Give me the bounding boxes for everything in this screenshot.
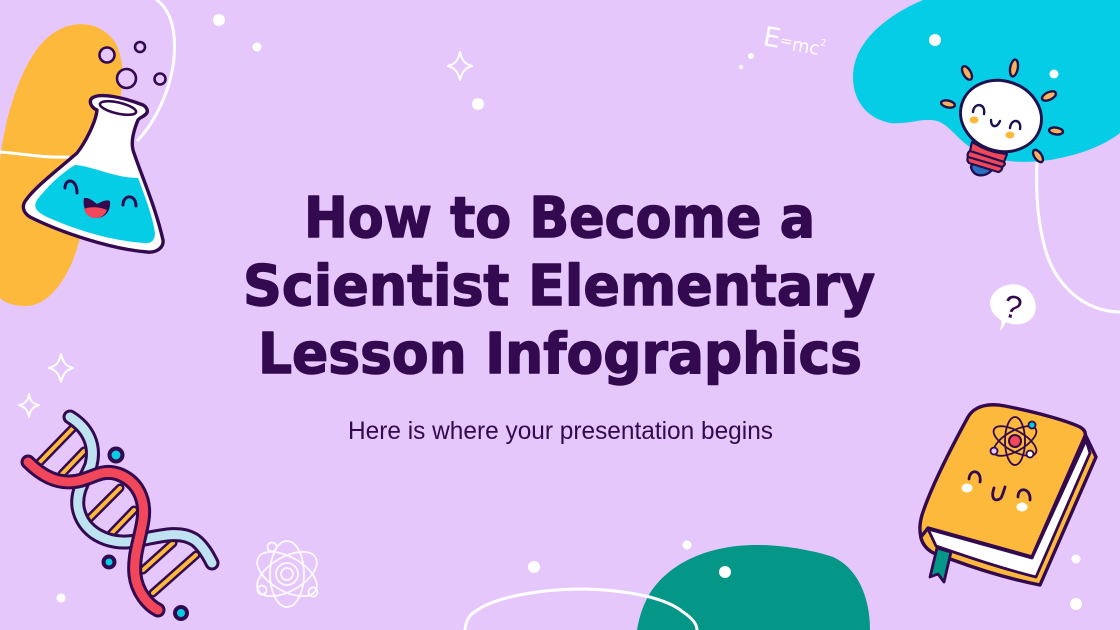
title xyxy=(243,186,875,387)
icon: smiling flask xyxy=(23,42,165,252)
back cover xyxy=(920,432,1096,585)
cyan blob: top right xyxy=(853,0,1120,162)
title: Scientist Elementary xyxy=(243,254,875,319)
rungs xyxy=(40,428,196,593)
bulb face xyxy=(970,105,1020,138)
front cover xyxy=(920,405,1085,557)
bulb glass xyxy=(951,70,1051,162)
pages xyxy=(928,440,1090,577)
icon: white atom xyxy=(250,541,324,607)
icon: E=mc2 formula: mc xyxy=(790,34,821,60)
bulb base xyxy=(971,158,992,175)
icon: DNA helix xyxy=(28,417,212,619)
subtitle: Here is where your presentation begins xyxy=(348,417,773,445)
green blob: bottom xyxy=(637,545,870,630)
flask face xyxy=(65,181,136,218)
flask liquid xyxy=(35,165,155,243)
icon: sparkles xyxy=(19,52,472,417)
yellow blob: top left xyxy=(0,24,123,306)
title: Lesson Infographics xyxy=(258,322,862,387)
title: How to Become a xyxy=(304,186,815,251)
white curve: top left xyxy=(0,0,174,157)
book atom emblem xyxy=(989,417,1041,465)
book face xyxy=(962,472,1030,512)
blue dots xyxy=(104,448,187,619)
bookmark xyxy=(930,548,951,582)
red strand xyxy=(28,462,158,610)
icon: E=mc2 formula: = xyxy=(779,31,794,51)
icon: smiling lightbulb xyxy=(940,59,1063,175)
flask body xyxy=(23,96,163,252)
white curve: right xyxy=(1037,162,1120,312)
white curve: bottom xyxy=(465,589,697,630)
icon: E=mc2 formula: E xyxy=(761,21,783,55)
icon: E=mc2 formula: 2 xyxy=(819,38,827,49)
icon: smiling science book xyxy=(920,405,1096,585)
icon: question speech bubble xyxy=(990,284,1036,331)
bulb rays xyxy=(940,59,1063,164)
icon: question speech bubble: ? xyxy=(1000,288,1025,326)
flask rim xyxy=(99,98,137,118)
bubbles xyxy=(100,42,166,88)
blue strand xyxy=(70,417,212,563)
